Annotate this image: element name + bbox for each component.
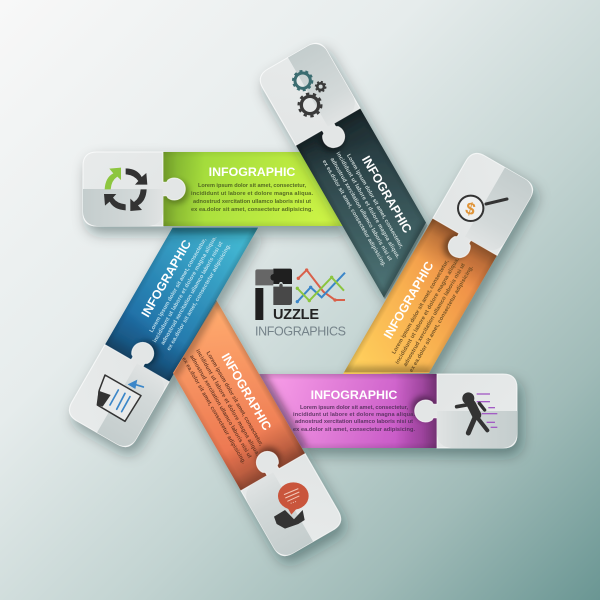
panel: dark slate strip: INFOGRAPHIC: [359, 153, 414, 236]
logo line chart: [296, 268, 345, 303]
panel: dark slate strip: Lorem ipsum dolor sit amet, consectetur,: [345, 153, 404, 250]
panel: orange strip: adnostrud xercitation ullamco laboris nisi ut: [403, 262, 467, 368]
panel: purple strip: adnostrud xercitation ullamco laboris nisi ut: [295, 419, 413, 425]
panel: orange strip: INFOGRAPHIC: [381, 259, 437, 341]
panel: blue strip: [65, 191, 258, 451]
panel: green strip: Lorem ipsum dolor sit amet, consectetur,: [198, 183, 306, 189]
icon: document with arrow: [97, 375, 143, 421]
panel: orange strip: ex ea.dolor sit amet, consectetur adipisicing.: [409, 264, 475, 373]
panel: dark slate strip: adnostrud xercitation ullamco laboris nisi ut: [329, 157, 393, 262]
icon: magnifier with dollar: [458, 196, 507, 221]
panel: dark slate strip: incididunt ut labore et dolore magna aliqua.: [335, 151, 401, 260]
icon: speech bubbles: [274, 482, 309, 529]
panel: blue strip: Lorem ipsum dolor sit amet, consectetur,: [149, 237, 208, 334]
panel: blue strip: adnostrud xercitation ullamco laboris nisi ut: [160, 241, 224, 346]
panel: coral strip: adnostrud xercitation ullamco laboris nisi ut: [188, 354, 252, 460]
panel: purple strip: INFOGRAPHIC: [311, 388, 397, 402]
panel: blue strip: INFOGRAPHIC: [139, 237, 194, 320]
panel: dark slate strip: ex ea.dolor sit amet, consectetur adipisicing.: [321, 159, 387, 268]
panel: orange strip: Lorem ipsum dolor sit amet, consectetur,: [391, 259, 451, 355]
logo: puzzle infographics title: [255, 268, 346, 338]
logo word INFOGRAPHICS: INFOGRAPHICS: [255, 324, 346, 338]
panel: purple strip: [259, 374, 517, 448]
panel: coral strip: INFOGRAPHIC: [219, 351, 274, 433]
panel: coral strip: ex ea.dolor sit amet, consectetur adipisicing.: [180, 357, 247, 466]
panel: purple strip: Lorem ipsum dolor sit amet, consectetur,: [300, 405, 408, 411]
icon: cycle arrows: [104, 168, 147, 211]
icon: gears: [293, 71, 326, 116]
logo word UZZLE: UZZLE: [273, 307, 319, 323]
logo puzzle mark: [255, 269, 292, 320]
icon: running figure: [457, 392, 497, 433]
panel: coral strip: Lorem ipsum dolor sit amet, consectetur,: [205, 351, 264, 447]
panel: purple strip: incididunt ut labore et dolore magna aliqua.: [293, 412, 415, 418]
panel: coral strip: incididunt ut labore et dolore magna aliqua.: [194, 349, 261, 458]
panel: green strip: [83, 152, 343, 226]
panel: coral strip: [152, 300, 345, 560]
panel: green strip: adnostrud xercitation ullamco laboris nisi ut: [193, 199, 311, 205]
panel: green strip: INFOGRAPHIC: [209, 165, 295, 179]
panel: purple strip: ex ea.dolor sit amet, consectetur adipisicing.: [293, 427, 415, 433]
panel: blue strip: ex ea.dolor sit amet, consectetur adipisicing.: [166, 243, 233, 352]
panel: blue strip: incididunt ut labore et dolore magna aliqua.: [152, 235, 219, 344]
icon: magnifier with dollar: $: [463, 199, 478, 220]
panel: dark slate strip: [256, 39, 449, 299]
panel: green strip: ex ea.dolor sit amet, consectetur adipisicing.: [191, 207, 313, 213]
panel: orange strip: incididunt ut labore et dolore magna aliqua.: [395, 256, 461, 365]
panel: orange strip: [343, 149, 537, 411]
panel: green strip: incididunt ut labore et dolore magna aliqua.: [191, 191, 313, 197]
